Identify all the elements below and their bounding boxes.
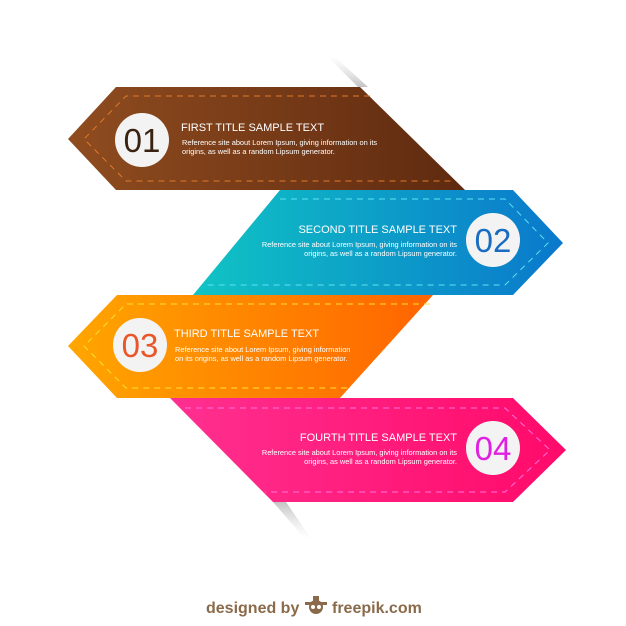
text: fourth body: origins, as well as a random Lipsum generator. bbox=[304, 457, 457, 466]
panel: first bbox=[68, 87, 465, 190]
panel: fourth bbox=[170, 398, 566, 502]
icon: number 01 bbox=[115, 113, 169, 167]
shadow: top fold bbox=[326, 55, 368, 87]
icon: number 04: 04 bbox=[475, 430, 511, 467]
text: third body: Reference site about Lorem Ipsum, giving information bbox=[175, 345, 350, 354]
panel: third bbox=[68, 295, 433, 398]
shadow: bottom fold bbox=[273, 502, 312, 540]
footer: credit: designed by bbox=[206, 600, 299, 617]
icon: number 01: 01 bbox=[124, 122, 160, 159]
icon: number 04 bbox=[466, 421, 520, 475]
icon: number 02: 02 bbox=[475, 222, 511, 259]
icon: number 03 bbox=[113, 318, 167, 372]
text: first title: FIRST TITLE SAMPLE TEXT bbox=[181, 122, 324, 134]
text: third body: on its origins, as well as a random Lipsum generator. bbox=[175, 354, 348, 363]
icon: number 02 bbox=[466, 213, 520, 267]
text: second body: origins, as well as a random Lipsum generator. bbox=[304, 249, 457, 258]
text: second title: SECOND TITLE SAMPLE TEXT bbox=[298, 224, 457, 236]
text: second body: Reference site about Lorem Ipsum, giving information on its bbox=[262, 240, 457, 249]
text: fourth body: Reference site about Lorem Ipsum, giving information on its bbox=[262, 448, 457, 457]
text: first body: origins, as well as a random Lipsum generator. bbox=[182, 147, 335, 156]
icon: number 03: 03 bbox=[122, 327, 158, 364]
text: fourth title: FOURTH TITLE SAMPLE TEXT bbox=[300, 432, 457, 444]
footer: credit bbox=[206, 596, 422, 617]
footer: credit: freepik.com bbox=[332, 600, 422, 617]
text: third title: THIRD TITLE SAMPLE TEXT bbox=[174, 328, 319, 340]
icon: freepik logo bbox=[305, 596, 327, 614]
panel: second bbox=[193, 190, 563, 295]
text: first body: Reference site about Lorem Ipsum, giving information on its bbox=[182, 138, 377, 147]
